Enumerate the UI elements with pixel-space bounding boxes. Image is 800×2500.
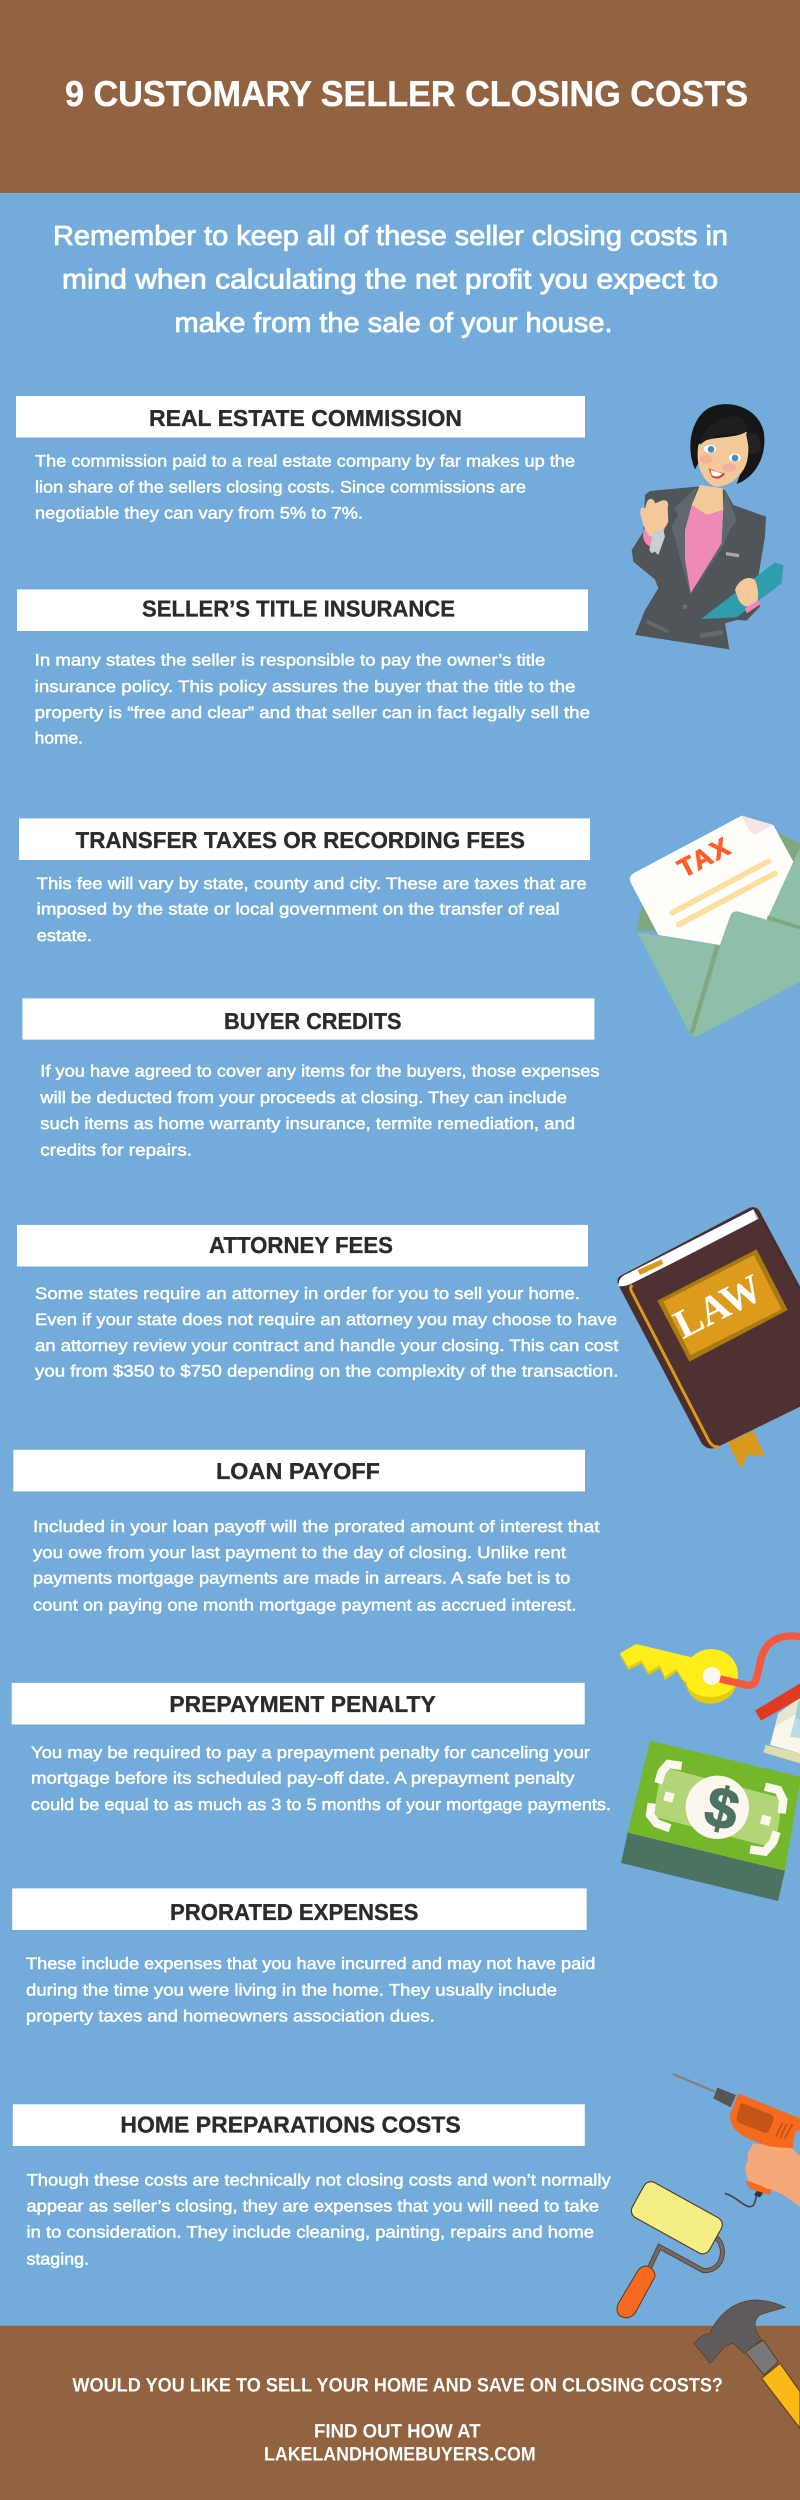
body text <box>31 1744 611 1814</box>
body text: staging. <box>26 2251 89 2269</box>
panel: buyer credits <box>22 998 599 1160</box>
heading: TRANSFER TAXES OR RECORDING FEES <box>76 827 525 853</box>
body text: in to consideration. They include cleaning, painting, repairs and home <box>26 2224 594 2242</box>
body text: Some states require an attorney in order for you to sell your home. <box>35 1285 580 1303</box>
heading: SELLER’S TITLE INSURANCE <box>142 595 455 621</box>
intro text: make from the sale of your house. <box>174 307 612 338</box>
body text <box>39 1063 599 1160</box>
footer band <box>0 2326 800 2500</box>
panel: home preparations costs <box>13 2104 612 2269</box>
intro text <box>53 220 728 338</box>
body text: Though these costs are technically not closing costs and won’t normally <box>26 2172 612 2190</box>
heading <box>12 1683 585 1724</box>
body text <box>35 652 590 748</box>
body text <box>35 452 575 522</box>
heading <box>12 1888 587 1930</box>
footer call to action: WOULD YOU LIKE TO SELL YOUR HOME AND SAVE ON CLOSING COSTS? <box>72 2374 723 2396</box>
key <box>620 1644 738 1704</box>
body text: Included in your loan payoff will the prorated amount of interest that <box>33 1518 600 1536</box>
heading: PRORATED EXPENSES <box>170 1899 418 1925</box>
panel: loan payoff <box>13 1450 600 1615</box>
footer call to action: FIND OUT HOW AT <box>314 2421 481 2443</box>
heading: LOAN PAYOFF <box>216 1458 380 1484</box>
body text: The commission paid to a real estate company by far makes up the <box>35 452 575 470</box>
heading <box>16 396 585 438</box>
body text: home. <box>35 730 83 748</box>
icon: house key and dollar bill <box>620 1636 800 1901</box>
panel: transfer taxes <box>19 818 590 945</box>
icon: law book <box>617 1207 800 1469</box>
body text: property is “free and clear” and that seller can in fact legally sell the <box>35 704 590 722</box>
footer call to action: LAKELANDHOMEBUYERS.COM <box>264 2443 536 2465</box>
heading <box>22 998 594 1040</box>
body text: will be deducted from your proceeds at closing. They can include <box>39 1089 567 1107</box>
body text: These include expenses that you have incurred and may not have paid <box>26 1955 595 1973</box>
icon: paint roller <box>617 2179 725 2318</box>
body text <box>35 1285 619 1381</box>
heading: BUYER CREDITS <box>224 1008 402 1034</box>
body text: an attorney review your contract and handle your closing. This can cost <box>35 1337 619 1355</box>
body text: estate. <box>37 927 92 945</box>
heading <box>19 818 590 860</box>
body text: such items as home warranty insurance, termite remediation, and <box>40 1115 575 1133</box>
body text: In many states the seller is responsible to pay the owner’s title <box>35 652 545 670</box>
body text: Even if your state does not require an attorney you may choose to have <box>35 1311 617 1329</box>
dollar bill: $ <box>699 1773 745 1843</box>
body text: you owe from your last payment to the day of closing. Unlike rent <box>33 1544 566 1562</box>
heading: REAL ESTATE COMMISSION <box>149 405 462 431</box>
body text: count on paying one month mortgage payment as accrued interest. <box>33 1597 576 1615</box>
body text: credits for repairs. <box>40 1142 192 1160</box>
icon: hammer <box>694 2300 800 2428</box>
heading: PREPAYMENT PENALTY <box>169 1691 436 1717</box>
title: 9 CUSTOMARY SELLER CLOSING COSTS <box>65 73 748 114</box>
body text: negotiable they can vary from 5% to 7%. <box>35 504 363 522</box>
body text <box>26 1955 595 2025</box>
header band <box>0 0 800 193</box>
body text: property taxes and homeowners association dues. <box>26 2007 435 2025</box>
house <box>755 1683 800 1763</box>
panel: real estate commission <box>16 396 585 522</box>
body text: insurance policy. This policy assures the buyer that the title to the <box>35 678 575 696</box>
body text: This fee will vary by state, county and city. These are taxes that are <box>37 875 587 893</box>
dollar bill <box>621 1741 800 1901</box>
heading <box>17 589 588 631</box>
body text <box>37 875 587 945</box>
body text: mortgage before its scheduled pay-off date. A prepayment penalty <box>31 1770 575 1788</box>
body text <box>33 1518 600 1615</box>
panel: prorated expenses <box>12 1888 595 2025</box>
heading: HOME PREPARATIONS COSTS <box>120 2112 461 2138</box>
body text: payments mortgage payments are made in arrears. A safe bet is to <box>33 1570 570 1588</box>
body text: imposed by the state or local government on the transfer of real <box>37 901 560 919</box>
footer call to action <box>72 2374 723 2465</box>
body text: you from $350 to $750 depending on the complexity of the transaction. <box>35 1363 618 1381</box>
intro text: Remember to keep all of these seller closing costs in <box>53 220 728 251</box>
icon: businesswoman with keys <box>632 404 783 649</box>
panel: seller's title insurance <box>17 589 590 748</box>
body text: You may be required to pay a prepayment penalty for canceling your <box>31 1744 591 1762</box>
panel: attorney fees <box>17 1225 619 1381</box>
heading <box>13 2104 585 2146</box>
body text <box>26 2172 612 2269</box>
body text: If you have agreed to cover any items for the buyers, those expenses <box>40 1063 600 1081</box>
body text: could be equal to as much as 3 to 5 months of your mortgage payments. <box>31 1796 611 1814</box>
body text: appear as seller’s closing, they are expenses that you will need to take <box>26 2198 599 2216</box>
heading <box>17 1225 588 1266</box>
icon: power drill <box>673 2074 800 2207</box>
body text: lion share of the sellers closing costs. Since commissions are <box>35 478 526 496</box>
icon: tax envelope: TAX <box>673 831 736 883</box>
heading <box>13 1450 585 1491</box>
icon: tax envelope <box>630 816 800 1037</box>
panel: prepayment penalty <box>12 1683 611 1814</box>
intro text: mind when calculating the net profit you expect to <box>62 264 718 295</box>
body text: during the time you were living in the home. They usually include <box>26 1981 557 1999</box>
icon: law book: LAW <box>666 1265 769 1347</box>
heading: ATTORNEY FEES <box>209 1232 393 1258</box>
